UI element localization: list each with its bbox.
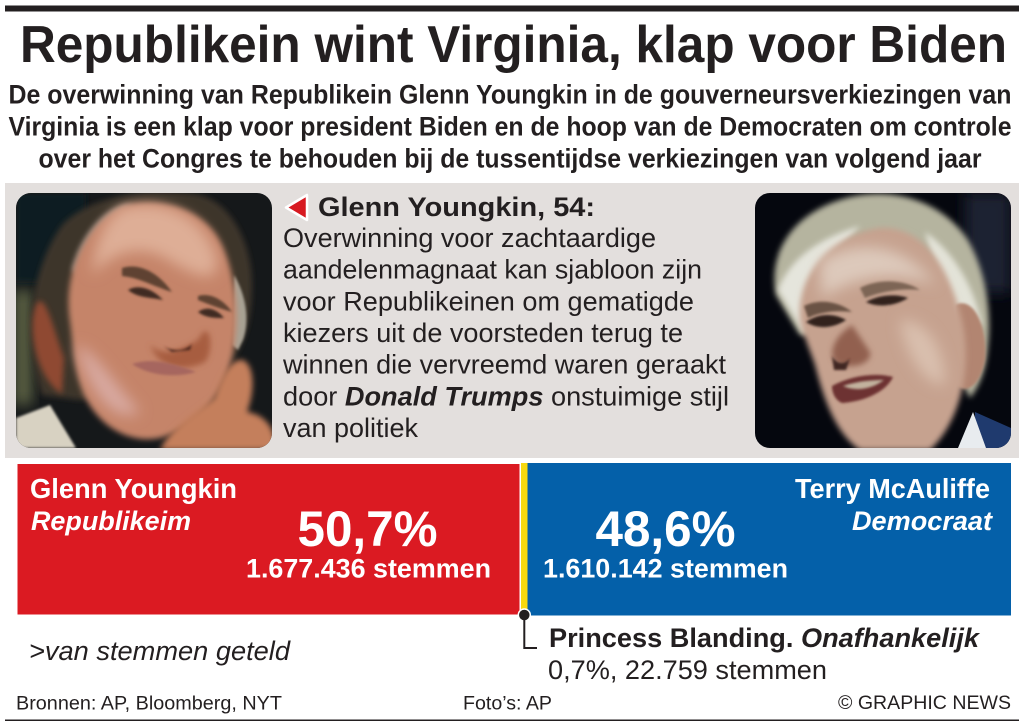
panel: Youngkin result: 1.677.436 stemmen xyxy=(246,554,491,584)
label: Princess Blanding xyxy=(548,623,981,685)
photo: Terry McAuliffe xyxy=(755,193,1011,450)
intro text xyxy=(8,80,1012,174)
panel: Youngkin result: Republikeim xyxy=(31,506,191,536)
label: Princess Blanding: 0,7%, 22.759 stemmen xyxy=(548,655,827,685)
mouth xyxy=(132,361,196,375)
photo: Glenn Youngkin xyxy=(14,192,276,450)
panel: McAuliffe result: 48,6% xyxy=(596,501,736,557)
eyes xyxy=(128,287,163,300)
profile text: Overwinning voor zachtaardige xyxy=(283,223,656,253)
profile text: winnen die vervreemd waren geraakt xyxy=(282,350,726,380)
profile text: door Donald Trumps onstuimige stijl xyxy=(283,381,729,411)
hair xyxy=(31,192,252,400)
collar xyxy=(16,405,76,448)
ear xyxy=(32,301,64,394)
eyebrows xyxy=(122,266,172,292)
panel: Youngkin result xyxy=(18,464,520,614)
profile text: aandelenmagnaat kan sjabloon zijn xyxy=(283,255,702,285)
panel: Youngkin result: 50,7% xyxy=(298,501,438,557)
top rule xyxy=(5,6,1019,12)
note: votes counted: >van stemmen geteld xyxy=(29,636,291,666)
photo credit: Foto’s: AP xyxy=(463,694,552,714)
eyes xyxy=(806,315,846,327)
credit: © GRAPHIC NEWS xyxy=(838,693,1011,714)
bottom rule xyxy=(5,720,1019,721)
panel: Youngkin result: Glenn Youngkin xyxy=(30,473,237,504)
ear xyxy=(955,303,985,389)
sources: Bronnen: AP, Bloomberg, NYT xyxy=(16,694,282,714)
icon: red pointer to left photo xyxy=(286,195,307,220)
hair xyxy=(774,194,989,398)
profile text xyxy=(282,192,729,443)
mouth xyxy=(832,375,893,403)
label: Princess Blanding: Princess Blanding. Onafhankelijk xyxy=(549,623,981,653)
nose xyxy=(162,344,192,352)
face xyxy=(69,203,236,439)
panel: McAuliffe result: 1.610.142 stemmen xyxy=(543,554,788,584)
intro text: over het Congres te behouden bij de tussentijdse verkiezingen van volgend jaar xyxy=(38,144,982,174)
panel: profile background xyxy=(5,183,1019,458)
face xyxy=(800,228,966,450)
collar and jacket xyxy=(975,412,1011,448)
nose xyxy=(832,325,870,366)
eyebrows xyxy=(804,302,852,318)
panel: McAuliffe result: Democraat xyxy=(852,506,993,536)
hand xyxy=(160,360,276,450)
profile text: kiezers uit de voorsteden terug te xyxy=(283,318,683,348)
profile text: van politiek xyxy=(283,413,418,443)
panel: McAuliffe result: Terry McAuliffe xyxy=(795,473,990,504)
panel: McAuliffe result xyxy=(528,463,1011,616)
profile text: Glenn Youngkin, 54: xyxy=(318,192,595,222)
divider: Blanding share xyxy=(521,463,528,615)
profile text: voor Republikeinen om gematigde xyxy=(283,286,694,316)
leader line: Princess Blanding xyxy=(518,609,537,648)
